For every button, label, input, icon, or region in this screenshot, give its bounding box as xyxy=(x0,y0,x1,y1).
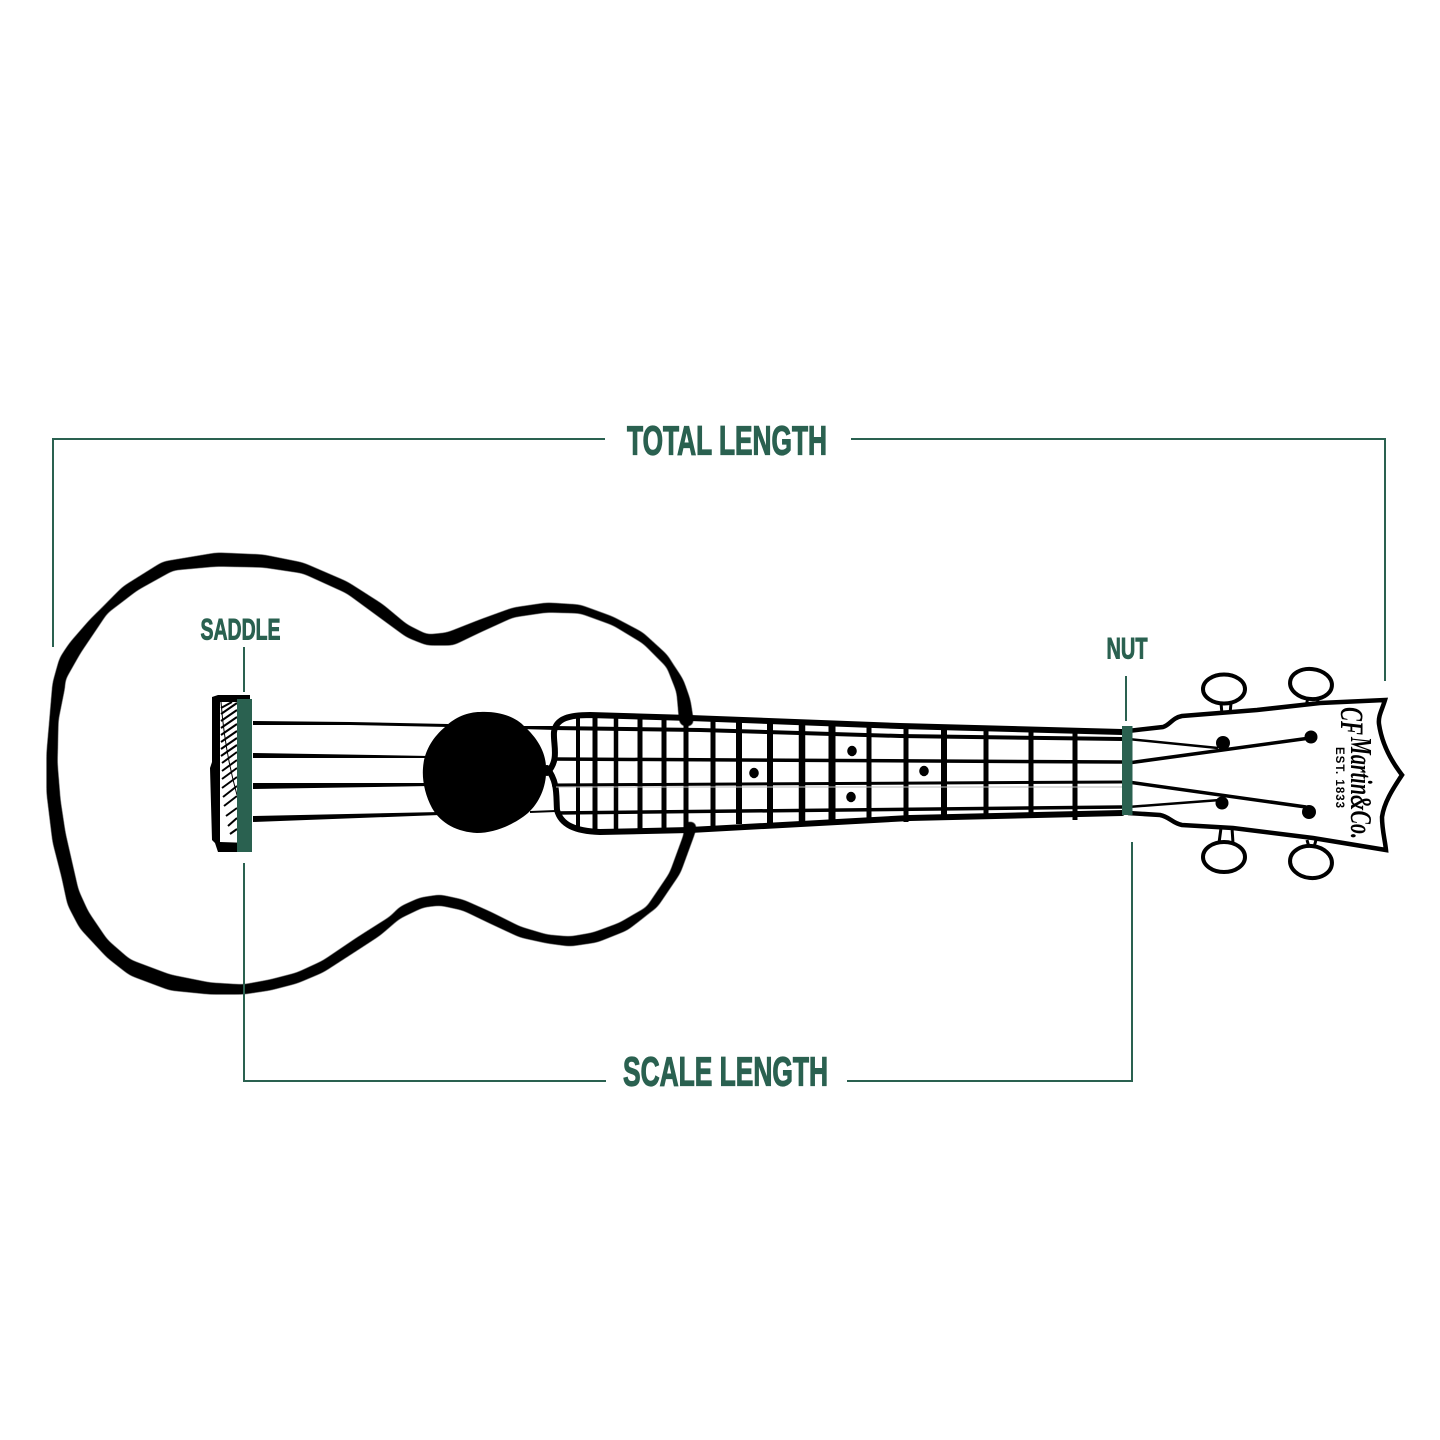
headstock logo xyxy=(1333,707,1379,839)
tuner posts xyxy=(1216,730,1318,819)
strings on headstock xyxy=(1128,738,1310,807)
label: saddle: SADDLE xyxy=(200,614,280,646)
fretboard with frets and strings xyxy=(547,715,1122,832)
est. 1833: EST. 1833 xyxy=(1333,747,1345,808)
nut highlight xyxy=(1122,726,1132,815)
scale length bracket xyxy=(244,842,1132,1081)
headstock outline xyxy=(1128,700,1402,850)
strings on body xyxy=(253,721,556,822)
saddle leader line xyxy=(243,647,245,692)
frets xyxy=(578,717,1075,829)
saddle highlight xyxy=(237,699,252,852)
bridge with hatching xyxy=(210,695,250,852)
ukulele body outline xyxy=(47,553,697,994)
headstock logo: CF xyxy=(1333,707,1369,735)
headstock xyxy=(1128,667,1402,880)
sound hole xyxy=(423,712,546,833)
label: scale length: SCALE LENGTH xyxy=(623,1048,828,1094)
headstock logo: Martin&Co. xyxy=(1344,736,1379,839)
strings over fretboard xyxy=(552,728,1122,813)
fretboard outline xyxy=(547,715,1122,832)
label: total length: TOTAL LENGTH xyxy=(627,418,827,464)
total length bracket xyxy=(53,439,1385,681)
tuning pegs xyxy=(1203,667,1334,880)
position dots xyxy=(749,746,929,802)
nut leader line xyxy=(1125,676,1127,721)
label: nut: NUT xyxy=(1106,632,1148,666)
